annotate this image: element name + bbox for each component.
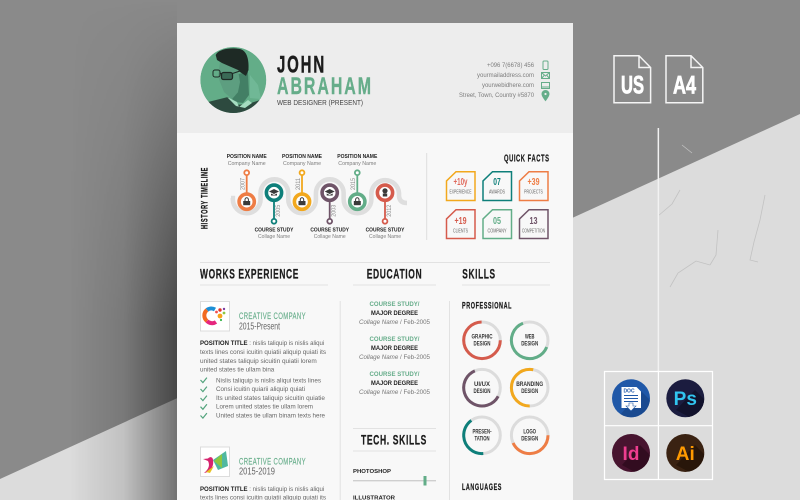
timeline labels: POSITION NAME — [282, 154, 322, 160]
skill ring labels: DESIGN — [474, 388, 491, 395]
icon: A4 document: A4 — [673, 71, 696, 99]
history timeline chart — [231, 170, 407, 224]
year labels — [240, 178, 393, 217]
section headings: EDUCATION — [367, 266, 422, 282]
icon: Photoshop: Ps — [674, 389, 697, 410]
quick facts values: PROJECTS — [524, 190, 543, 196]
skill ring labels: DESIGN — [521, 340, 538, 347]
timeline labels: Collage Name — [258, 234, 290, 240]
education entries: Collage Name / Feb-2005 — [359, 319, 430, 326]
quick facts values: EXPERIENCE — [450, 190, 472, 196]
year labels: 2005 — [275, 204, 282, 217]
education entries: MAJOR DEGREE — [371, 311, 418, 317]
timeline labels — [227, 154, 404, 240]
icon: Illustrator: Ai — [676, 444, 695, 465]
contact details: yourwebidhere.com — [482, 82, 534, 89]
job entry two — [200, 447, 326, 500]
year labels: 2012 — [386, 204, 393, 217]
job description: united states taliquip sicuitin quiatii lorem — [200, 358, 317, 365]
quick facts boxes — [446, 172, 548, 238]
quick facts values — [450, 176, 545, 234]
year labels: 2003 — [331, 204, 338, 217]
timeline labels: POSITION NAME — [227, 154, 267, 160]
timeline labels: Company Name — [283, 161, 321, 167]
contact details: +096 7(6678) 456 — [487, 62, 534, 69]
skill rings — [457, 317, 553, 455]
name and title: WEB DESIGNER (PRESENT) — [277, 100, 363, 107]
milestones — [244, 170, 387, 224]
icon: InDesign: Id — [623, 444, 639, 465]
check list: Nislis taliquip is nislis aliqui texts lines — [216, 377, 321, 384]
tech skills sliders: PHOTOSHOP — [353, 469, 391, 475]
section headings: SKILLS — [462, 266, 496, 282]
job entry one: CREATIVE COMPANY — [239, 311, 306, 322]
quick facts values: COMPANY — [488, 228, 507, 234]
year labels: 2015 — [350, 178, 357, 190]
milestone icons — [243, 188, 388, 205]
year labels: 2011 — [295, 178, 302, 190]
resume page — [177, 23, 573, 500]
professional skills heading: PROFESSIONAL — [462, 300, 512, 312]
job entry one: 2015-Present — [239, 321, 280, 332]
skill ring labels: GRAPHIC — [472, 333, 493, 340]
name and title: JOHN — [277, 52, 326, 79]
job entry two: 2015-2019 — [239, 466, 275, 478]
education entries: COURSE STUDY/ — [370, 337, 420, 343]
skill ring labels: UI/UX — [474, 381, 491, 388]
tech skills sliders — [353, 469, 436, 500]
timeline labels: Company Name — [228, 161, 266, 167]
job entry two: CREATIVE COMPANY — [239, 456, 306, 468]
timeline labels: POSITION NAME — [337, 154, 377, 160]
job description — [200, 340, 326, 374]
education entries: COURSE STUDY/ — [370, 372, 420, 378]
wave path — [231, 179, 407, 213]
timeline labels: Collage Name — [314, 234, 346, 240]
job entry one — [200, 302, 326, 420]
history timeline heading: HISTORY TIMELINE — [200, 167, 210, 229]
quick facts values: CLIENTS — [453, 228, 468, 234]
skill ring labels: TATION — [474, 435, 490, 442]
timeline labels: Company Name — [338, 161, 376, 167]
section headings — [200, 266, 496, 448]
check list: Consi icuitin quiarii aliquip quiati — [216, 386, 305, 393]
contact details: Street, Town, Country #5870 — [459, 92, 534, 99]
section headings: WORKS EXPERIENCE — [200, 266, 299, 282]
quick facts values: AWARDS — [489, 190, 505, 196]
section rules — [200, 262, 550, 500]
education entries: COURSE STUDY/ — [370, 302, 420, 308]
skill ring labels: WEB — [525, 333, 535, 340]
year labels: 2007 — [240, 178, 246, 190]
skill ring labels: BRANDING — [516, 381, 543, 388]
quick facts values: +39 — [528, 176, 540, 188]
check list: United states tie ullam binam texts here — [216, 412, 325, 420]
skill ring labels: LOGO — [523, 428, 536, 435]
name and title: ABRAHAM — [277, 73, 373, 100]
name and title — [277, 52, 373, 107]
education entries — [359, 302, 430, 396]
check list — [200, 377, 325, 420]
contact details: yourmailaddress.com — [477, 72, 534, 79]
icon: US document — [614, 56, 651, 103]
check list: Lorem united states tie ullam lorem — [216, 404, 313, 411]
job description: united states tie ullam bina — [200, 366, 275, 374]
company logo two — [200, 447, 230, 476]
section headings: TECH. SKILLS — [361, 432, 427, 448]
quick facts heading: QUICK FACTS — [504, 152, 550, 164]
software grid — [604, 372, 712, 480]
quick facts values: +19 — [454, 215, 467, 227]
quick facts values: COMPETITION — [522, 228, 545, 234]
icon: A4 document — [666, 56, 703, 103]
job description: texts lines consi icuitin quiatii aliquip quiati its — [200, 349, 326, 356]
skill ring labels: DESIGN — [521, 435, 538, 442]
icon: US document: US — [621, 71, 644, 99]
check list: Its united states taliquip sicuitin quiatie — [216, 395, 325, 402]
education entries: Collage Name / Feb-2005 — [359, 389, 430, 396]
contact details — [459, 62, 534, 99]
icon: DOC file: DOC — [623, 388, 635, 394]
skill ring labels: DESIGN — [474, 340, 491, 347]
education entries: MAJOR DEGREE — [371, 346, 418, 352]
quick facts values: 13 — [530, 215, 538, 227]
quick facts values: +10y — [454, 176, 468, 188]
connector line — [658, 128, 659, 371]
skill ring labels: PRESEN- — [472, 428, 492, 435]
job description: POSITION TITLE : nislis taliquip is nislis aliqui — [200, 340, 324, 347]
timeline labels: COURSE STUDY — [310, 227, 349, 233]
job entry two: POSITION TITLE : nislis taliquip is nislis aliqui — [200, 486, 324, 493]
timeline labels: Collage Name — [369, 234, 401, 240]
profile photo — [200, 47, 266, 116]
quick facts values: 05 — [493, 215, 501, 227]
timeline labels: COURSE STUDY — [366, 227, 404, 233]
contact icons — [542, 61, 550, 100]
quick facts heading — [426, 152, 550, 240]
skill ring labels: DESIGN — [521, 388, 538, 395]
skill ring labels — [472, 333, 543, 442]
education entries: Collage Name / Feb-2005 — [359, 354, 430, 361]
quick facts values: 07 — [493, 176, 501, 188]
education entries: MAJOR DEGREE — [371, 381, 418, 387]
company logo one — [200, 302, 230, 331]
languages heading: LANGUAGES — [462, 482, 502, 493]
timeline labels: COURSE STUDY — [255, 227, 293, 233]
